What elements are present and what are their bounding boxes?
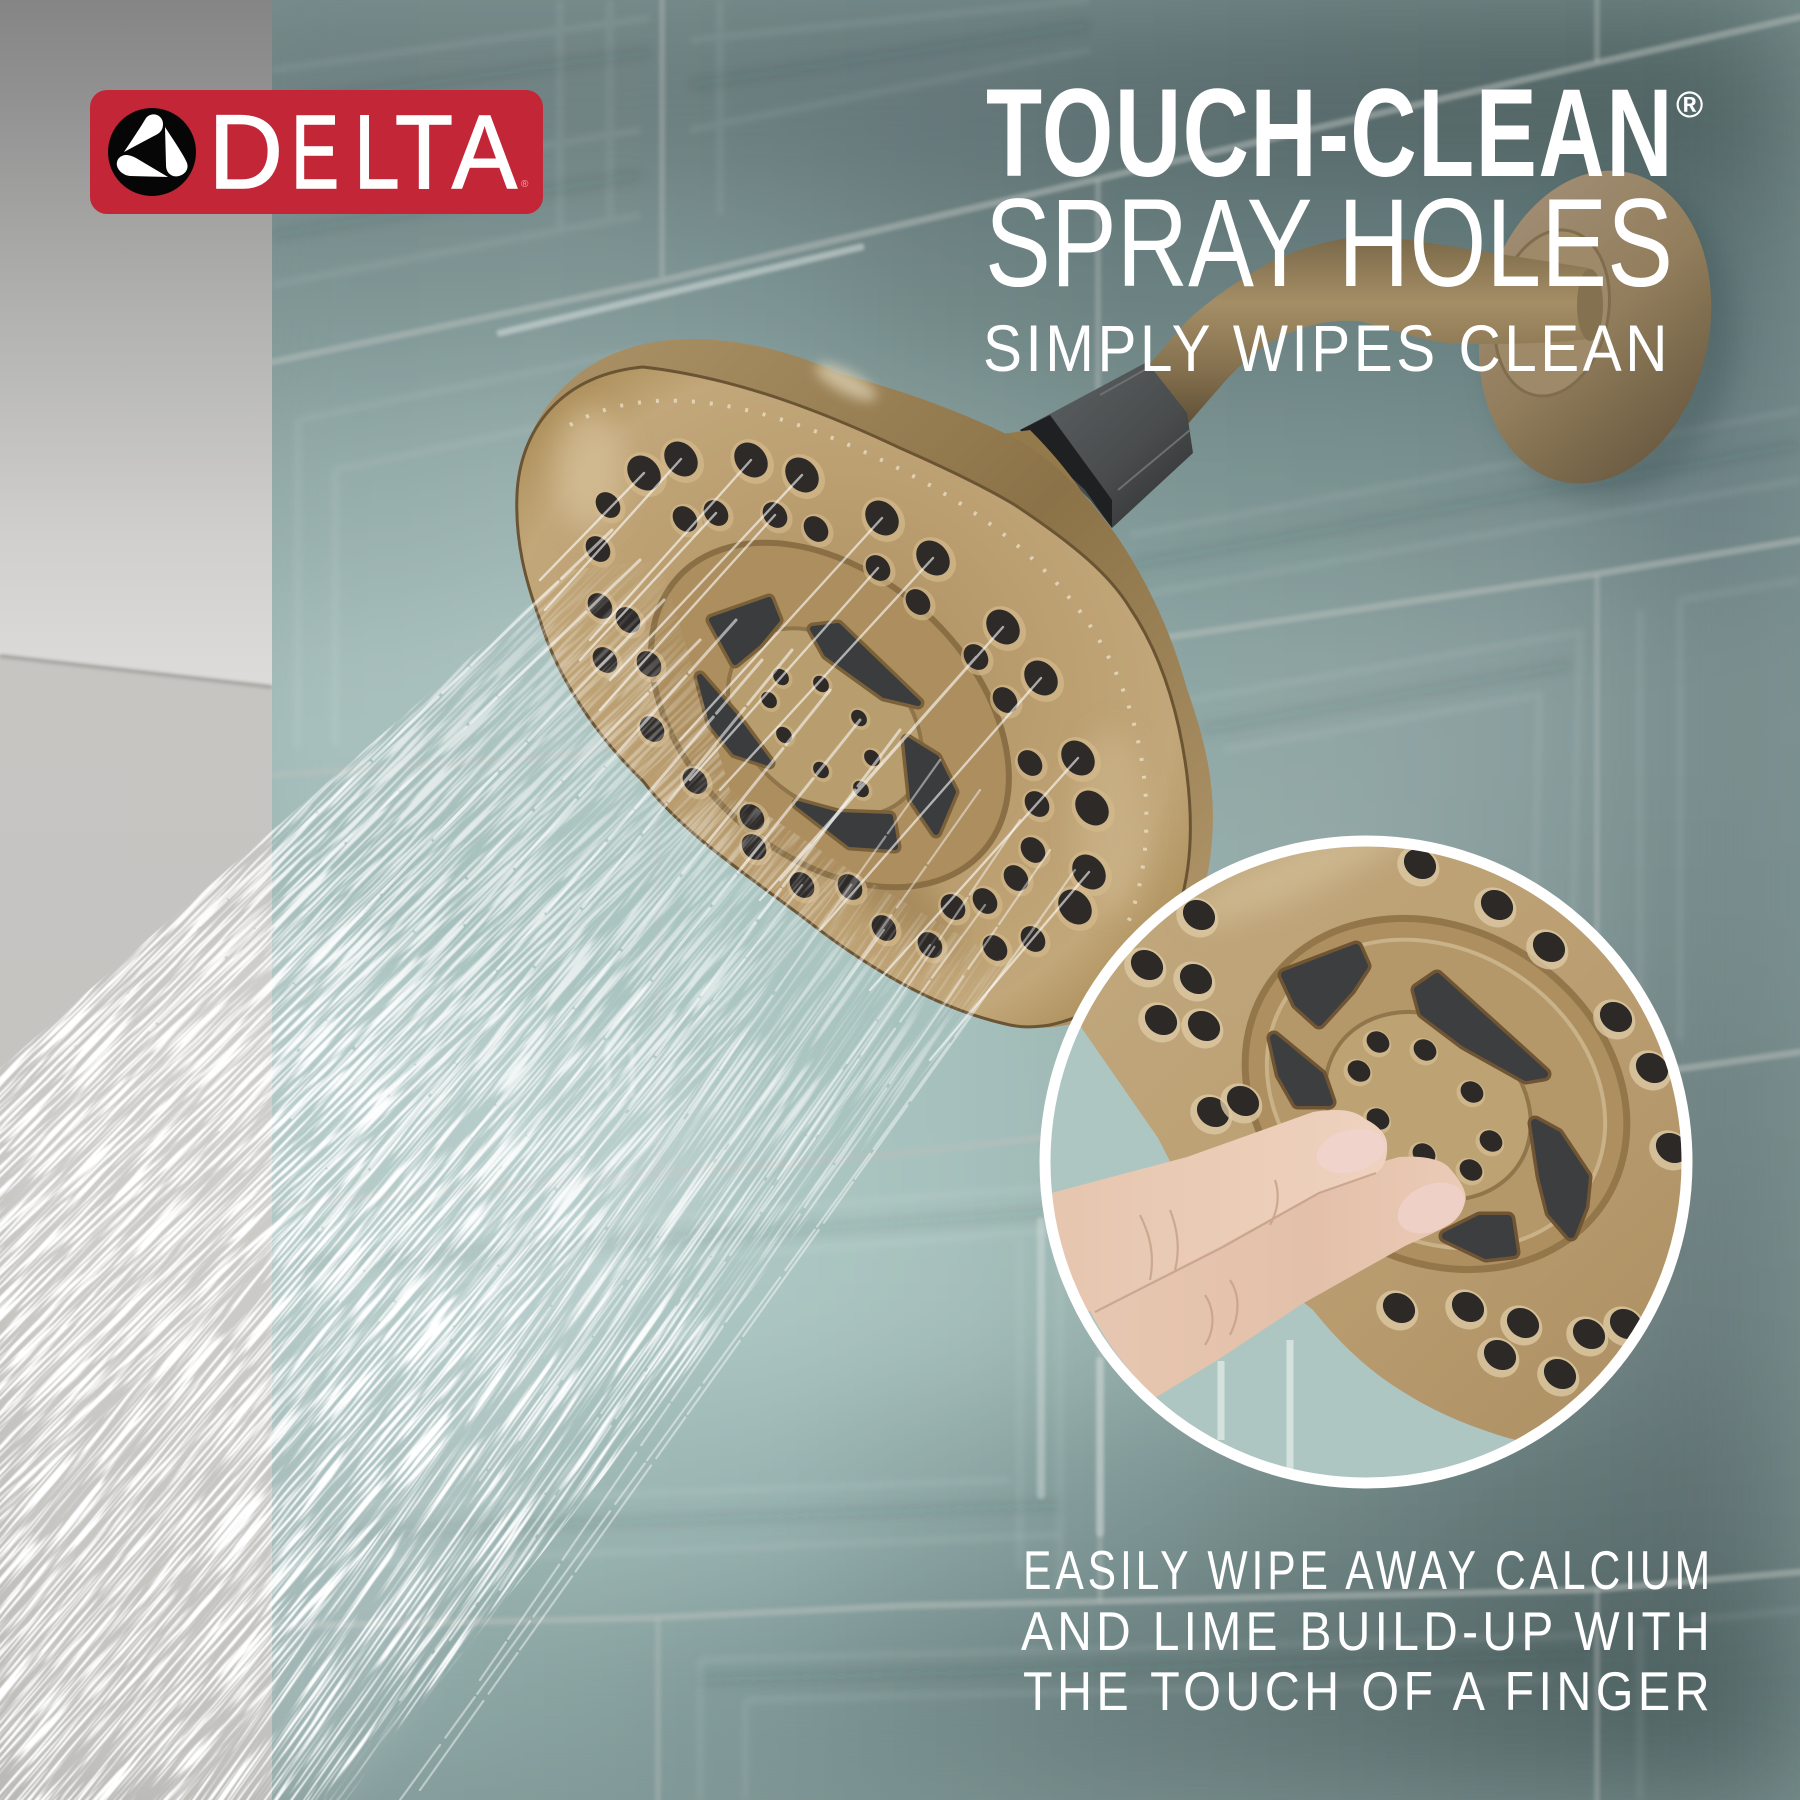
shower head bbox=[517, 339, 1213, 1028]
inset centre plate bbox=[1290, 974, 1566, 1238]
zoom inset circle bbox=[1040, 799, 1720, 1490]
curved arm bbox=[1147, 237, 1597, 425]
inset ring highlight bbox=[1209, 878, 1663, 1310]
wordmark: L bbox=[354, 94, 400, 211]
shower arm and wall flange bbox=[1147, 149, 1755, 515]
wall flange plate bbox=[1451, 149, 1739, 505]
inset background tile bbox=[1050, 1027, 1516, 1478]
arm collar socket bbox=[1577, 269, 1603, 341]
large spray holes bbox=[615, 429, 1124, 940]
individual water strands bbox=[60, 459, 1089, 1800]
wordmark: T bbox=[395, 94, 453, 211]
wordmark: E bbox=[291, 94, 339, 211]
finger creases bbox=[1095, 1173, 1376, 1345]
head body silhouette bbox=[517, 339, 1213, 1028]
inset oval ring bbox=[1179, 848, 1693, 1340]
registered mark: ® bbox=[1676, 84, 1703, 125]
rim beading bbox=[570, 401, 1146, 930]
flange inner dome bbox=[1480, 219, 1624, 407]
centre plate bbox=[691, 590, 959, 854]
registered mark: ® bbox=[521, 179, 529, 190]
face metallic sheen bbox=[556, 410, 1144, 971]
inset centre holes bbox=[1338, 1024, 1510, 1191]
inset clipped photo bbox=[1050, 846, 1682, 1478]
inset sheen bbox=[1181, 799, 1419, 941]
inset shower head face bbox=[1040, 830, 1720, 1490]
lower finger bbox=[1085, 1157, 1466, 1399]
dark spray crescents bbox=[700, 600, 953, 847]
head neck bbox=[975, 430, 1112, 590]
upper fingernail bbox=[1312, 1122, 1390, 1180]
inset large spray holes bbox=[1116, 838, 1699, 1405]
soft mist over the spray bbox=[0, 900, 760, 1800]
wall flange shadow bbox=[1469, 165, 1755, 515]
lower fingernail bbox=[1390, 1173, 1472, 1243]
water spray bbox=[0, 459, 1089, 1800]
ball joint collar bbox=[1020, 362, 1193, 528]
title block bbox=[983, 64, 1703, 385]
caption text bbox=[1021, 1539, 1714, 1722]
red badge bbox=[90, 90, 543, 214]
inset crescent outlines bbox=[1274, 948, 1585, 1255]
wordmark: A bbox=[452, 94, 517, 211]
centre oval ring bbox=[584, 474, 1076, 956]
caption line 2: AND LIME BUILD-UP WITH bbox=[1021, 1600, 1714, 1662]
medium spray holes bbox=[576, 483, 1061, 973]
upper finger bbox=[1040, 1110, 1387, 1320]
background: grey side wall bbox=[0, 0, 272, 1800]
Delta logo badge bbox=[90, 90, 543, 214]
logo icon: black circle with trefoil bbox=[108, 108, 196, 196]
wordmark: D bbox=[208, 94, 283, 211]
dark spray crescent outlines bbox=[700, 600, 953, 847]
subtitle: SIMPLY WIPES CLEAN bbox=[983, 311, 1671, 385]
inset white ring bbox=[1045, 841, 1687, 1483]
body highlight bbox=[811, 356, 881, 408]
dense spray streaks bbox=[400, 1198, 403, 1201]
caption line 3: THE TOUCH OF A FINGER bbox=[1023, 1660, 1714, 1722]
centre spray holes bbox=[754, 662, 888, 805]
inset dark crescents bbox=[1274, 948, 1585, 1255]
spray face bbox=[517, 367, 1190, 1027]
